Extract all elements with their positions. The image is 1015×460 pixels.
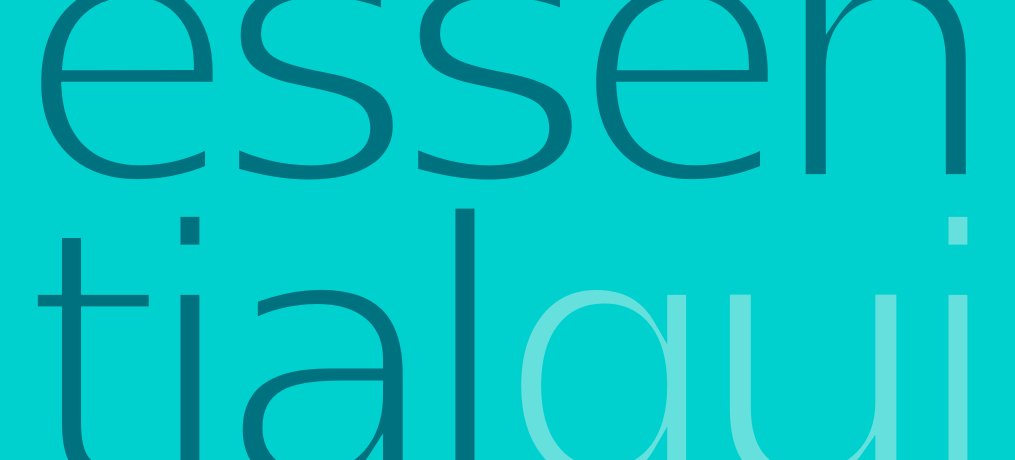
heading line 2 dark part: tial — [21, 138, 516, 460]
heading line 1: essen — [14, 0, 1005, 268]
heading line 2 light part: gui — [494, 148, 1009, 460]
